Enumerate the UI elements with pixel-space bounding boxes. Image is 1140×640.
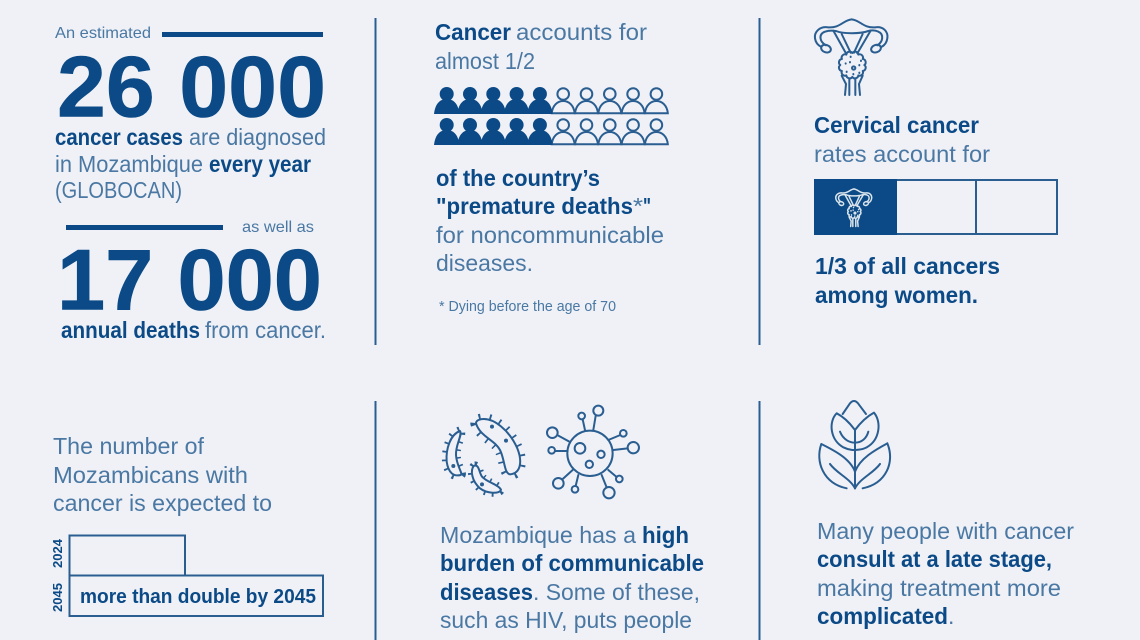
text: cancer cases description: cancer cases <box>55 124 183 150</box>
heading: cervical cancer <box>814 112 990 167</box>
panel: cancer cases and deaths <box>55 25 326 343</box>
label: 2024: 2024 <box>50 538 65 568</box>
text: communicable diseases: . Some of these, <box>533 579 700 605</box>
icon: bacteria <box>447 419 520 493</box>
text: premature deaths description: diseases. <box>436 250 533 276</box>
heading: cervical cancer: Cervical cancer <box>814 112 979 138</box>
label: more than double: more than double by 2045 <box>80 585 316 608</box>
text: premature deaths description: * <box>633 193 643 219</box>
panel: late stage consultation <box>817 401 1074 629</box>
text: late stage: consult at a late stage, <box>817 546 1052 572</box>
text: one third of cancers <box>815 253 1000 308</box>
text: cancer cases description <box>55 124 326 203</box>
text: one third of cancers: 1/3 of all cancers <box>815 253 1000 279</box>
text: communicable diseases: burden of communicable <box>440 550 704 576</box>
icon: plant <box>819 401 890 488</box>
label: 2045: 2045 <box>50 583 65 612</box>
text: annual deaths: from cancer. <box>205 317 326 343</box>
rule: middle <box>66 225 223 230</box>
text: premature deaths description: of the country’s <box>436 165 600 191</box>
footnote: * Dying before the age of 70 <box>439 299 616 315</box>
text: an estimated: An estimated <box>55 25 151 42</box>
text: late stage: . <box>948 603 954 629</box>
text: communicable diseases: such as HIV, puts people <box>440 607 692 633</box>
text: premature deaths description <box>436 165 664 276</box>
text: cancer cases description: are diagnosed <box>189 124 326 150</box>
text: cancer cases description: in Mozambique <box>55 151 203 177</box>
column dividers <box>374 18 760 640</box>
heading: cancer accounts for almost half: accounts for <box>516 19 647 45</box>
rule: top <box>162 32 323 37</box>
number: 17 000: 17 000 <box>57 232 322 328</box>
text: annual deaths <box>61 317 326 343</box>
text: number of Mozambicans: cancer is expected to <box>53 490 272 516</box>
text: premature deaths description: for noncommunicable <box>436 222 664 248</box>
chart: 2024 vs 2045 bars <box>50 536 323 616</box>
text: one third of cancers: among women. <box>815 282 978 308</box>
panel: communicable diseases <box>440 406 704 633</box>
text: cancer cases description: every year <box>209 151 311 177</box>
chart: one third box <box>814 179 1057 235</box>
panel: cervical cancer <box>814 19 1057 308</box>
text: communicable diseases: high <box>642 522 689 548</box>
heading: cancer accounts for almost half: Cancer <box>435 19 511 45</box>
text: late stage: complicated <box>817 603 948 629</box>
text: cancer cases description: (GLOBOCAN) <box>55 177 182 203</box>
text: number of Mozambicans: Mozambicans with <box>53 462 248 488</box>
icon: uterus with tumour <box>815 19 887 95</box>
icon: virus <box>547 406 639 498</box>
text: communicable diseases: Mozambique has a <box>440 522 636 548</box>
text: late stage: making treatment more <box>817 575 1061 601</box>
heading: cancer accounts for almost half <box>435 19 647 74</box>
text: communicable diseases: diseases <box>440 579 533 605</box>
text: communicable diseases <box>440 522 704 633</box>
text: late stage: Many people with cancer <box>817 518 1074 544</box>
text: number of Mozambicans <box>53 433 272 516</box>
pictogram: people, half filled <box>434 87 668 145</box>
heading: cancer accounts for almost half: almost 1/2 <box>435 48 535 74</box>
text: as well as: as well as <box>242 219 314 236</box>
number: 26 000: 26 000 <box>57 40 326 136</box>
panel: projected cases <box>50 433 323 616</box>
icon: uterus small <box>836 189 872 226</box>
text: number of Mozambicans: The number of <box>53 433 205 459</box>
text: premature deaths description: " <box>643 193 651 219</box>
text: premature deaths description: "premature deaths <box>436 193 633 219</box>
text: late stage <box>817 518 1074 629</box>
panel: premature deaths <box>434 19 668 315</box>
heading: cervical cancer: rates account for <box>814 141 990 167</box>
text: annual deaths: annual deaths <box>61 317 200 343</box>
